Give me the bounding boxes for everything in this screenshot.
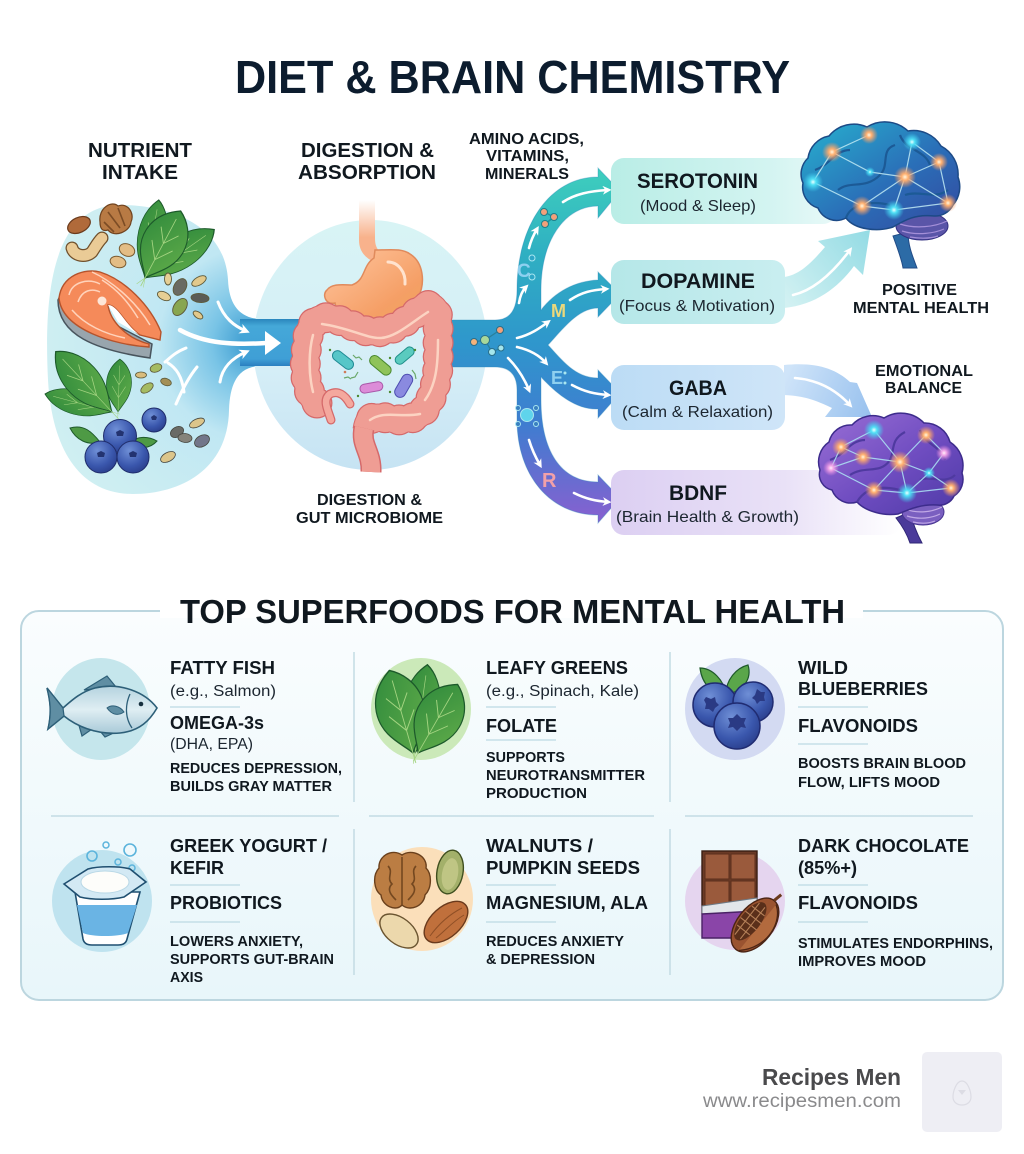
pathway: gaba: (Calm & Relaxation) (622, 404, 773, 421)
molecule icons in branches: M (551, 301, 566, 321)
text: dark chocolate: DARK CHOCOLATE (798, 836, 969, 856)
branching arrows to neurotransmitters (440, 168, 620, 523)
molecule icons in branches (470, 208, 566, 492)
label: positive mental health: MENTAL HEALTH (853, 300, 989, 317)
label: positive mental health: POSITIVE (882, 282, 957, 299)
text: greek yogurt (170, 836, 334, 986)
text: fatty fish (170, 658, 342, 795)
text: leafy greens: NEUROTRANSMITTER (486, 768, 646, 784)
card: leafy greens (366, 658, 646, 802)
icon: yogurt cup (52, 842, 152, 952)
label: amino acids vitamins minerals: VITAMINS, (486, 148, 569, 165)
text: fatty fish: FATTY FISH (170, 658, 275, 678)
icon: blueberries (685, 658, 785, 760)
text: greek yogurt: SUPPORTS GUT-BRAIN (170, 952, 334, 968)
pathway: serotonin (611, 158, 836, 224)
text: wild blueberries: BLUEBERRIES (798, 679, 928, 699)
molecule icons in branches: R (542, 470, 557, 492)
text: walnuts and pumpkin seeds: WALNUTS / (486, 836, 593, 856)
brain: emotional balance (819, 413, 963, 543)
text: leafy greens: LEAFY GREENS (486, 658, 628, 678)
text: dark chocolate: IMPROVES MOOD (798, 954, 926, 970)
pathway: bdnf: (Brain Health & Growth) (616, 509, 799, 526)
text: walnuts and pumpkin seeds (486, 836, 648, 968)
title: DIET & BRAIN CHEMISTRY (235, 51, 790, 103)
food: nuts (65, 204, 137, 269)
text: wild blueberries: BOOSTS BRAIN BLOOD (798, 756, 966, 772)
icon: spinach (366, 658, 477, 773)
heading: digestion and absorption (298, 140, 436, 184)
label: digestion and gut microbiome (296, 492, 443, 527)
label: emotional balance (875, 363, 973, 397)
arrows: flow into gut (165, 302, 281, 404)
molecule icons in branches: E (551, 368, 563, 388)
pathway: serotonin: SEROTONIN (637, 170, 758, 193)
pathway: bdnf (611, 470, 901, 535)
text: leafy greens: FOLATE (486, 716, 557, 736)
text: leafy greens: SUPPORTS (486, 750, 565, 766)
pathway: serotonin: (Mood & Sleep) (640, 198, 756, 215)
text: walnuts and pumpkin seeds: & DEPRESSION (486, 952, 595, 968)
heading: nutrient intake: NUTRIENT (88, 140, 192, 162)
label: positive mental health (853, 282, 989, 317)
text: walnuts and pumpkin seeds: MAGNESIUM, ALA (486, 893, 648, 913)
label: amino acids vitamins minerals: MINERALS (485, 166, 569, 183)
panel frame (21, 611, 1003, 1000)
text: leafy greens: PRODUCTION (486, 786, 587, 802)
pathway: gaba: GABA (669, 377, 727, 400)
icon: fish (47, 658, 157, 760)
text: fatty fish: OMEGA-3s (170, 713, 264, 733)
digestion circle (253, 220, 487, 470)
heading: nutrient intake: INTAKE (102, 162, 178, 184)
text: greek yogurt: PROBIOTICS (170, 893, 282, 913)
text: fatty fish: BUILDS GRAY MATTER (170, 779, 333, 795)
label: emotional balance: BALANCE (885, 380, 962, 397)
text: greek yogurt: GREEK YOGURT / (170, 836, 327, 856)
pathway: dopamine: DOPAMINE (641, 270, 755, 293)
footer: brand: www.recipesmen.com (702, 1091, 901, 1112)
microbiome bacteria (329, 345, 416, 399)
panel: top superfoods (21, 593, 1003, 1000)
panel: flow diagram (42, 122, 989, 543)
food: seeds (156, 273, 209, 321)
text: dark chocolate: STIMULATES ENDORPHINS, (798, 936, 993, 952)
text: wild blueberries: FLOW, LIFTS MOOD (798, 775, 940, 791)
label: digestion and gut microbiome: GUT MICROBIOME (296, 510, 443, 527)
text: greek yogurt: AXIS (170, 970, 203, 986)
card: wild blueberries (685, 658, 966, 791)
food: spinach top (121, 197, 223, 297)
text: leafy greens: (e.g., Spinach, Kale) (486, 683, 639, 700)
icon: chocolate and cacao pod (685, 851, 794, 961)
label: amino acids vitamins minerals: AMINO ACIDS, (469, 131, 584, 148)
card: fatty fish (47, 658, 342, 795)
arrow: gaba to brain (784, 364, 872, 417)
text: wild blueberries: WILD (798, 658, 848, 678)
text: greek yogurt: LOWERS ANXIETY, (170, 934, 303, 950)
heading: digestion and absorption: DIGESTION & (301, 140, 434, 162)
white arrows in branches (508, 190, 608, 502)
food: salmon steak (58, 271, 161, 358)
label: digestion and gut microbiome: DIGESTION & (317, 492, 422, 509)
text: wild blueberries: FLAVONOIDS (798, 716, 918, 736)
white arrows on brain connectors (793, 250, 850, 405)
text: dark chocolate: (85%+) (798, 858, 857, 878)
text: walnuts and pumpkin seeds: REDUCES ANXIETY (486, 934, 624, 950)
organ: esophagus and stomach (325, 200, 422, 322)
brain: positive mental health (801, 122, 960, 268)
label: amino acids vitamins minerals (469, 131, 584, 183)
heading: nutrient intake (88, 140, 192, 184)
footer: brand: Recipes Men (762, 1064, 901, 1090)
label: emotional balance: EMOTIONAL (875, 363, 973, 380)
text: greek yogurt: KEFIR (170, 858, 224, 878)
nutrient blob background (47, 205, 262, 494)
text: fatty fish: (DHA, EPA) (170, 736, 253, 753)
section heading: TOP SUPERFOODS FOR MENTAL HEALTH (180, 593, 845, 630)
text: dark chocolate: FLAVONOIDS (798, 893, 918, 913)
text: walnuts and pumpkin seeds: PUMPKIN SEEDS (486, 858, 640, 878)
arrow: dopamine to brain (784, 230, 870, 308)
pathway: dopamine: (Focus & Motivation) (619, 298, 775, 315)
molecule icons in branches: C (517, 261, 531, 282)
food: pale seeds (136, 362, 172, 395)
footer logo tile (922, 1052, 1002, 1132)
pathway: gaba (611, 365, 785, 430)
food: spinach lower (42, 340, 132, 431)
organ: colon (305, 306, 438, 472)
footer: brand (702, 1052, 1002, 1132)
food: mixed seeds (159, 416, 212, 465)
card: dark chocolate (685, 836, 993, 970)
text: leafy greens (486, 658, 646, 802)
card: greek yogurt (52, 836, 334, 986)
pathway: dopamine (611, 260, 785, 324)
text: fatty fish: (e.g., Salmon) (170, 683, 276, 700)
food: blueberries (70, 408, 166, 473)
intake band (240, 319, 310, 366)
text: dark chocolate (798, 836, 993, 970)
card: walnuts and pumpkin seeds (371, 836, 648, 968)
icon: nuts and seeds (371, 847, 475, 955)
text: fatty fish: REDUCES DEPRESSION, (170, 761, 342, 777)
pathway: bdnf: BDNF (669, 482, 727, 505)
text: wild blueberries (798, 658, 966, 791)
heading: digestion and absorption: ABSORPTION (298, 162, 436, 184)
